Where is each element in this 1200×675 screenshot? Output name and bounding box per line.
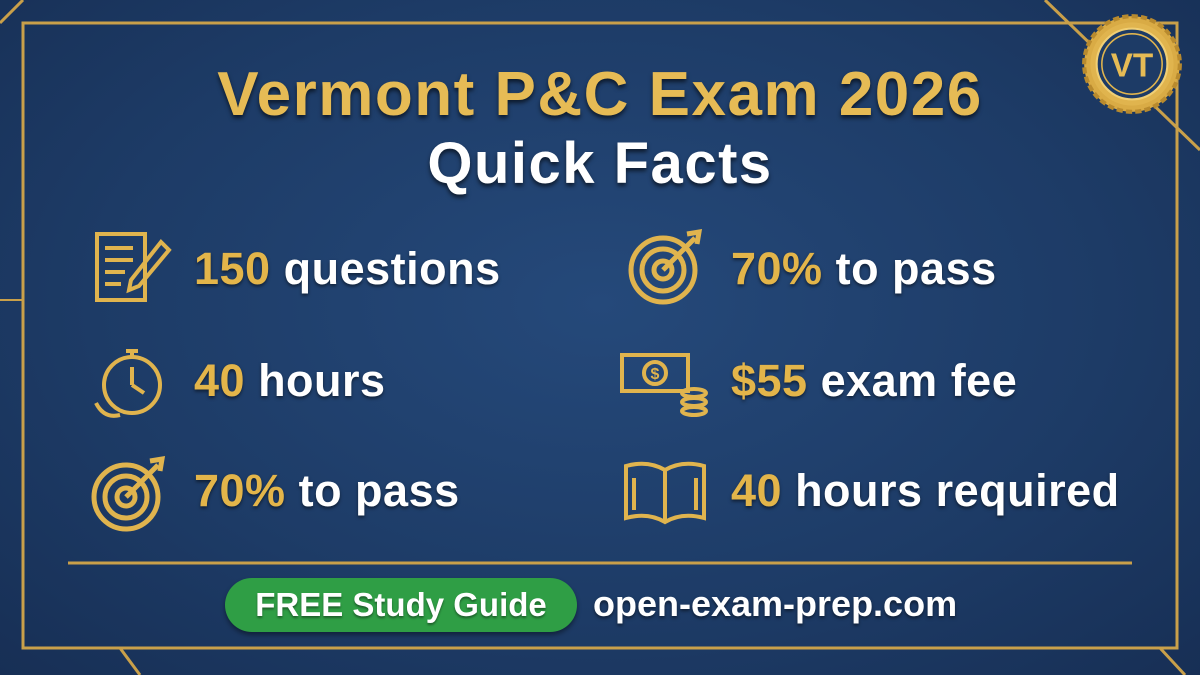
icon: stopwatch: [94, 349, 162, 418]
title: Quick Facts: [427, 131, 773, 196]
icon: target right: [628, 229, 702, 304]
button: FREE Study Guide: FREE Study Guide: [255, 586, 547, 623]
fact: 70% to pass right: 70% to pass: [731, 243, 997, 294]
fact: 40 hours: 40 hours: [194, 355, 386, 406]
badge: VT: VT: [1111, 47, 1153, 84]
button: FREE Study Guide: [225, 578, 577, 632]
icon: book: [624, 462, 706, 524]
fact: 150 questions: 150 questions: [194, 243, 501, 294]
title: [216, 60, 983, 200]
url text: open-exam-prep.com: [593, 583, 957, 624]
title: Vermont P&C Exam 2026: [217, 60, 983, 129]
icon: target: [92, 456, 165, 532]
icon: money: [620, 353, 708, 417]
icon: document pencil: [95, 232, 172, 302]
fact: 40 hours required: 40 hours required: [731, 465, 1120, 516]
icon: money: $: [651, 366, 660, 383]
fact: 70% to pass: 70% to pass: [194, 465, 460, 516]
badge: VT: [1082, 14, 1182, 114]
fact: $55 exam fee: $55 exam fee: [731, 355, 1017, 406]
